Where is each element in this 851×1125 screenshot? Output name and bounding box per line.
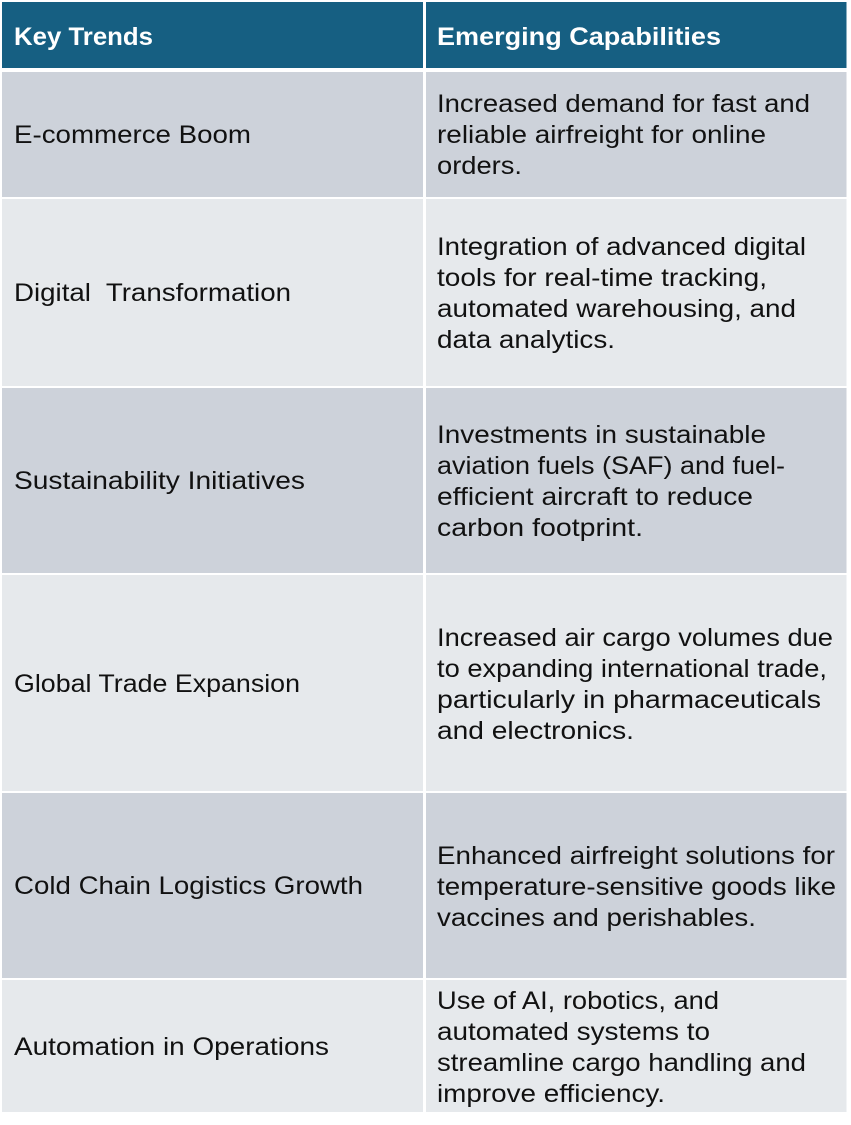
row: Automation in Operations: Use of AI, robotics, and (437, 987, 719, 1015)
row: Global Trade Expansion (2, 575, 846, 791)
row: E-commerce Boom (2, 72, 846, 197)
row: Automation in Operations: Automation in Operations (14, 1033, 329, 1061)
row: Automation in Operations: automated systems to (437, 1018, 710, 1046)
row: Global Trade Expansion: particularly in pharmaceuticals (437, 686, 821, 714)
row: Cold Chain Logistics Growth: Cold Chain Logistics Growth (14, 872, 363, 900)
row: Global Trade Expansion: to expanding international trade, (437, 655, 827, 683)
row: E-commerce Boom: reliable airfreight for online (437, 121, 766, 149)
row: Digital Transformation: Integration of advanced digital (437, 233, 806, 261)
row: Cold Chain Logistics Growth: Enhanced airfreight solutions for (437, 842, 835, 870)
row: Sustainability Initiatives: aviation fuels (SAF) and fuel- (437, 452, 785, 480)
row: E-commerce Boom: orders. (437, 152, 522, 180)
row: Cold Chain Logistics Growth: vaccines and perishables. (437, 904, 756, 932)
row: Sustainability Initiatives: Sustainability Initiatives (14, 467, 305, 495)
header row (2, 2, 846, 68)
row: Global Trade Expansion: Increased air cargo volumes due (437, 624, 833, 652)
row: Digital Transformation (2, 199, 846, 386)
row: Digital Transformation: automated warehousing, and (437, 295, 796, 323)
row: Sustainability Initiatives (2, 388, 846, 573)
row: Sustainability Initiatives: carbon footprint. (437, 514, 643, 542)
row: Global Trade Expansion: and electronics. (437, 717, 634, 745)
row: Digital Transformation: data analytics. (437, 326, 615, 354)
row: Automation in Operations: improve efficiency. (437, 1080, 665, 1108)
header row: Key Trends (14, 23, 153, 51)
row: E-commerce Boom: E-commerce Boom (14, 121, 251, 149)
row: Digital Transformation: Digital Transformation (14, 279, 291, 307)
row: Automation in Operations: streamline cargo handling and (437, 1049, 806, 1077)
row: E-commerce Boom: Increased demand for fast and (437, 90, 810, 118)
row: Sustainability Initiatives: Investments in sustainable (437, 421, 766, 449)
row: Cold Chain Logistics Growth (2, 793, 846, 978)
header row: Emerging Capabilities (437, 23, 721, 51)
row: Digital Transformation: tools for real-time tracking, (437, 264, 767, 292)
row: Automation in Operations (2, 980, 846, 1112)
row: Cold Chain Logistics Growth: temperature-sensitive goods like (437, 873, 836, 901)
row: Global Trade Expansion: Global Trade Expansion (14, 670, 300, 698)
row: Sustainability Initiatives: efficient aircraft to reduce (437, 483, 753, 511)
